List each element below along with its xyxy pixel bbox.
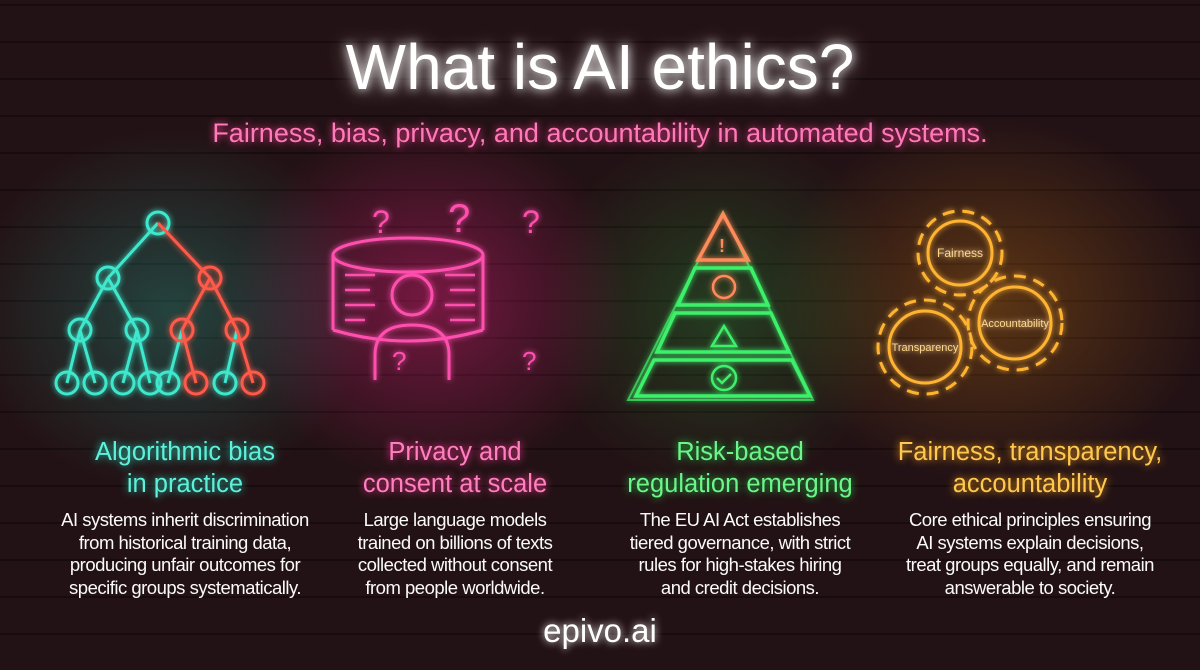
icon: privacy person: ?: [372, 204, 390, 240]
panel: privacy: trained on billions of texts: [358, 532, 552, 552]
panel: privacy: collected without consent: [358, 554, 552, 575]
panel: algorithmic bias: [61, 438, 309, 598]
icon: bias tree: [56, 212, 264, 394]
panel: principles: answerable to society.: [945, 576, 1115, 598]
footer brand: epivo.ai: [543, 612, 657, 649]
icons: [50, 197, 1068, 405]
icon: risk pyramid: !: [719, 236, 725, 256]
panel: principles: Fairness, transparency,: [898, 438, 1162, 466]
panel: algorithmic bias: AI systems inherit discrimination: [61, 509, 309, 530]
panel: principles: [894, 436, 1164, 598]
panel: regulation: The EU AI Act establishes: [640, 509, 840, 530]
panel: algorithmic bias: Algorithmic bias: [95, 438, 275, 466]
icon: gears: [878, 211, 1062, 394]
panel: regulation: regulation emerging: [627, 470, 853, 498]
panel: principles: Core ethical principles ensuring: [909, 509, 1151, 530]
panel: principles: AI systems explain decisions,: [916, 532, 1144, 552]
icon: privacy person: ?: [522, 346, 536, 376]
panel: privacy: from people worldwide.: [365, 576, 545, 598]
panel: algorithmic bias: producing unfair outcomes for: [70, 554, 300, 575]
icon: risk pyramid: [628, 212, 813, 400]
panel: regulation: Risk-based: [676, 438, 804, 466]
panel: principles: treat groups equally, and remain: [906, 554, 1154, 575]
icon: privacy person: ?: [448, 197, 470, 241]
panel: privacy: Large language models: [364, 509, 546, 530]
icon: gears: Transparency: [892, 342, 959, 354]
icon: privacy person: ?: [392, 346, 406, 376]
panel: regulation: [623, 436, 857, 598]
panel: algorithmic bias: from historical training data,: [79, 532, 291, 552]
panel: regulation: rules for high-stakes hiring: [639, 554, 841, 575]
panel: privacy: consent at scale: [363, 470, 547, 498]
icon: privacy person: ?: [522, 204, 540, 240]
panel: privacy: [358, 436, 552, 598]
icon: gears: Fairness: [937, 246, 983, 260]
panel: privacy: Privacy and: [388, 438, 522, 466]
panel: regulation: and credit decisions.: [661, 576, 819, 598]
subtitle: Fairness, bias, privacy, and accountability in automated systems.: [212, 118, 988, 148]
panel: algorithmic bias: in practice: [127, 470, 243, 498]
panel: principles: accountability: [953, 470, 1107, 498]
panel: algorithmic bias: specific groups systematically.: [69, 576, 301, 598]
title: What is AI ethics?: [346, 31, 854, 103]
panel: regulation: tiered governance, with strict: [630, 532, 850, 552]
icon: privacy person: [333, 197, 540, 380]
icon: gears: Accountability: [981, 318, 1049, 330]
